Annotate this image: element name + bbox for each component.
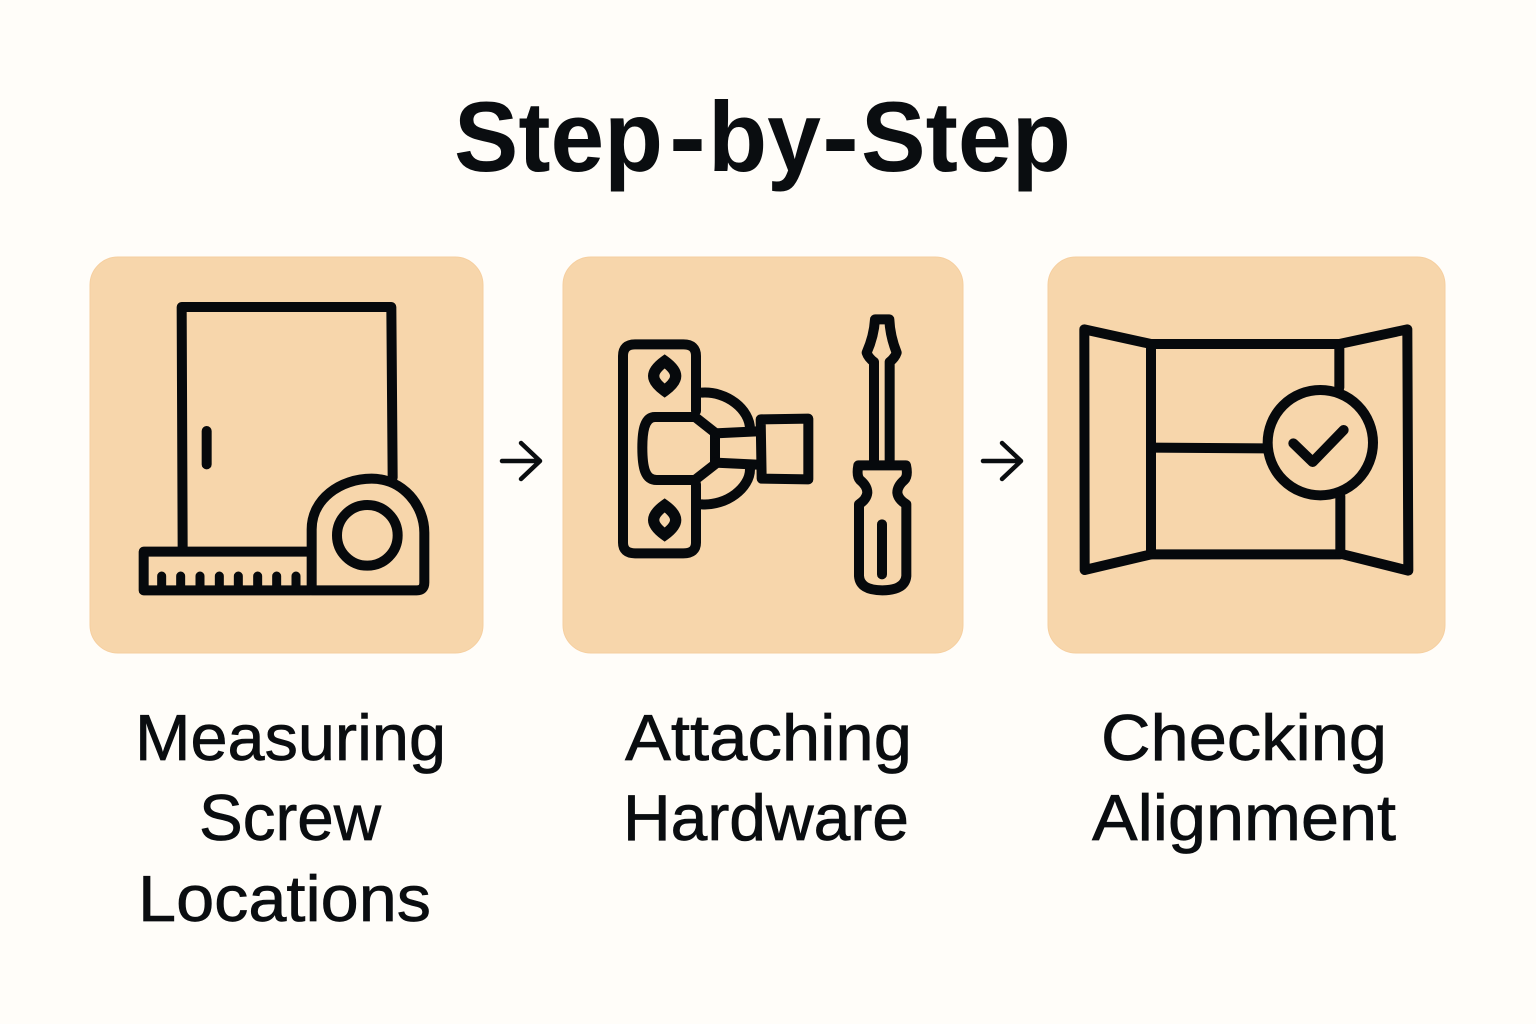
panel: attaching <box>563 257 963 653</box>
window right post <box>1339 344 1340 554</box>
lower screw hole <box>654 505 676 535</box>
panel: checking <box>1048 257 1445 653</box>
screwdriver handle <box>858 465 907 590</box>
label: measuring screw locations: Measuring <box>135 701 446 774</box>
hinge knuckle <box>642 417 715 480</box>
title: Step <box>861 81 1071 192</box>
window left shutter <box>1084 329 1151 570</box>
window middle rail <box>1151 433 1264 463</box>
icon: window frame and check badge <box>1084 329 1408 571</box>
title: - <box>822 81 859 192</box>
ruler ticks <box>162 576 296 588</box>
card background: attaching <box>563 257 963 653</box>
ruler <box>144 552 310 590</box>
label: measuring screw locations: Locations <box>138 862 431 935</box>
window top and bottom rails <box>1151 344 1340 554</box>
card background: checking <box>1048 257 1445 653</box>
check mark <box>1293 430 1344 462</box>
panel: measuring <box>90 257 483 653</box>
title: by <box>708 81 821 192</box>
label: attaching hardware: Attaching <box>625 701 912 774</box>
label: attaching hardware: Hardware <box>623 781 909 854</box>
label: checking alignment: Checking <box>1101 701 1387 774</box>
arrow: step 2 to step 3 <box>983 443 1021 479</box>
tape measure body <box>312 479 424 590</box>
window right shutter <box>1339 329 1408 571</box>
handle slot <box>867 524 897 574</box>
hinge plate <box>623 344 696 553</box>
tape measure dial <box>337 505 398 566</box>
check badge circle <box>1268 390 1373 495</box>
door outline <box>182 307 393 549</box>
hinge arm <box>715 431 757 465</box>
icon: screwdriver <box>858 319 907 590</box>
title: Step <box>454 81 663 192</box>
icon: hinge <box>623 344 808 553</box>
label: measuring screw locations: Screw <box>199 781 382 854</box>
screwdriver shaft and tip <box>867 319 897 464</box>
door handle <box>192 431 222 464</box>
icon: door and tape measure <box>144 307 424 590</box>
hinge block <box>761 419 808 479</box>
label: measuring screw locations <box>135 701 446 935</box>
label: attaching hardware <box>623 701 912 854</box>
label: checking alignment: Alignment <box>1092 781 1396 854</box>
hinge arcs <box>702 393 750 504</box>
arrow: step 1 to step 2 <box>502 443 540 479</box>
title: - <box>669 81 706 192</box>
card background: measuring <box>90 257 483 653</box>
label: checking alignment <box>1092 701 1396 854</box>
upper screw hole <box>654 361 676 391</box>
